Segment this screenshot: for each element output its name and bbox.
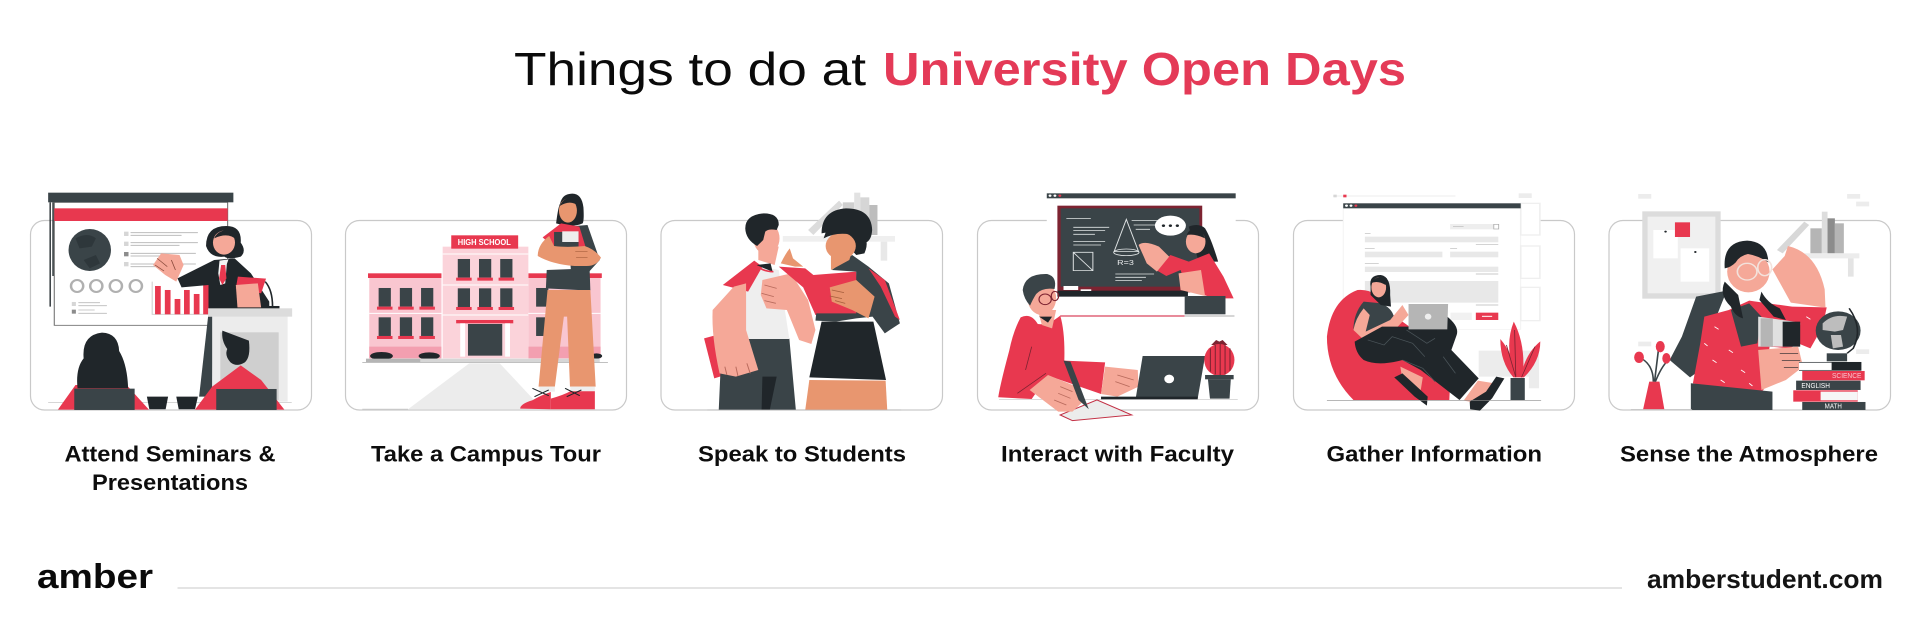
panel: attend seminars and presentations: [30, 193, 312, 495]
book spine labels: [1801, 372, 1861, 410]
panel: sense the atmosphere: [1609, 194, 1890, 466]
panel: interact with faculty: [978, 193, 1258, 466]
label: [64, 442, 276, 495]
board formula: R=3: [1117, 259, 1134, 267]
book spine labels: SCIENCE: [1832, 372, 1861, 380]
illustration: student with laptop on a beanbag and web form: [1327, 193, 1541, 411]
title: [514, 43, 1406, 95]
illustration: two students reading a book: [704, 193, 901, 410]
book spine labels: MATH: [1825, 402, 1842, 410]
label: Presentations: [92, 470, 248, 495]
label: Interact with Faculty: [1001, 442, 1235, 466]
illustration: student with glasses, globe and books: [1631, 194, 1869, 410]
illustration: online lesson with faculty: [998, 193, 1238, 421]
illustration: school building and student: [362, 194, 608, 409]
panel: take a campus tour: [346, 194, 626, 466]
label: Speak to Students: [698, 442, 906, 466]
footer: amber logo wordmark: amber: [37, 558, 153, 596]
illustration: presenter at a podium: [48, 193, 292, 410]
label: Attend Seminars &: [64, 442, 276, 466]
panel: gather information: [1294, 193, 1574, 466]
footer: website: amberstudent.com: [1647, 564, 1883, 594]
title: Things to do at: [514, 43, 866, 95]
book spine labels: ENGLISH: [1801, 382, 1830, 390]
label: Take a Campus Tour: [371, 442, 601, 466]
title: University Open Days: [883, 43, 1406, 95]
panel: speak to students: [661, 193, 942, 466]
label: Sense the Atmosphere: [1620, 442, 1878, 466]
sign text: HIGH SCHOOL: [458, 238, 511, 247]
label: Gather Information: [1326, 442, 1542, 466]
